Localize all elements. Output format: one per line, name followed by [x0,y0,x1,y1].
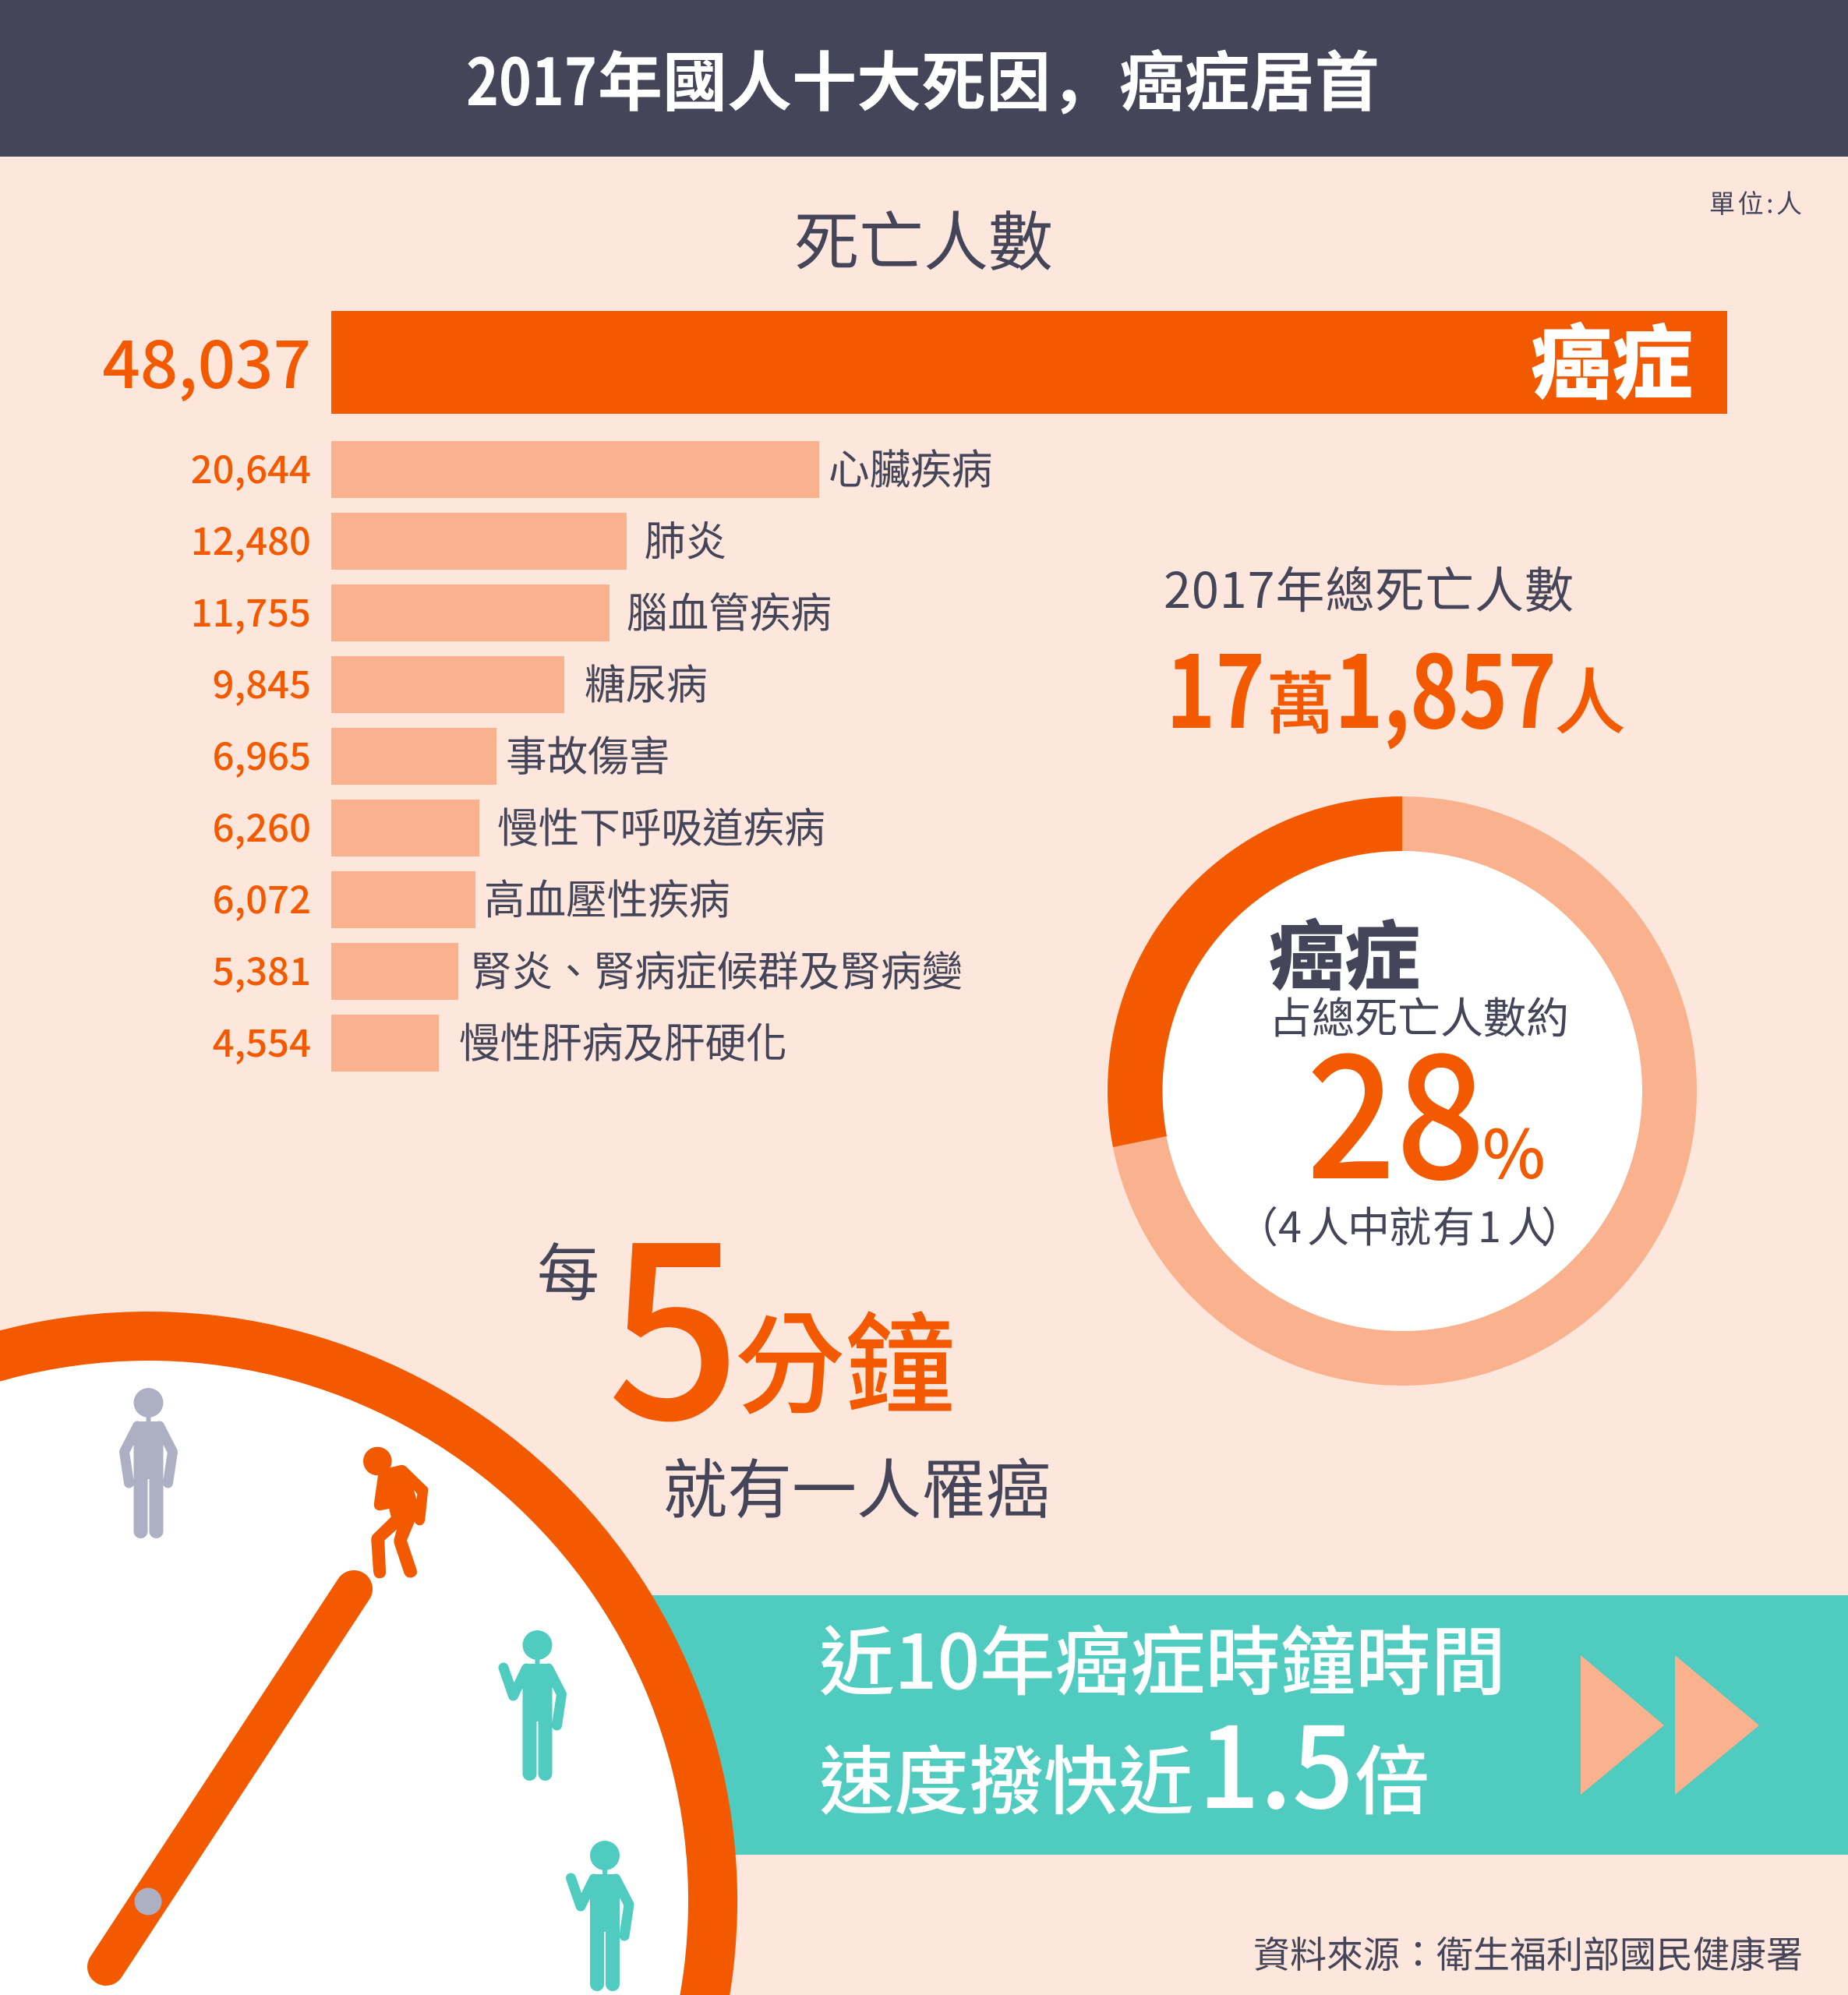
donut label: % [1482,1100,1546,1198]
total deaths block: 人 [1554,645,1626,749]
bar: diabetes: 糖尿病 [585,652,708,711]
title: 2017 [466,30,597,124]
bar: heart disease: 心臟疾病 [829,437,992,496]
bar: pneumonia: 肺炎 [645,509,726,568]
icon: double arrows [1581,1655,1759,1795]
bar: cancer [102,298,1727,415]
title: ， [1051,30,1115,124]
bar: chronic lower respiratory: 慢性下呼吸道疾病 [497,796,825,855]
unit note: 單位:人 [1709,183,1802,221]
teal banner [546,1595,1848,1855]
total deaths block [1164,552,1626,757]
bar: kidney disease: 腎炎、腎病症候群及腎病變 [471,939,963,998]
headline: every 5 minutes: 每 [537,1223,599,1314]
bar: chronic lower respiratory: 6,260 [213,798,311,853]
bar: diabetes [213,652,708,713]
total deaths block: 17 [1166,613,1265,757]
bar: liver disease [213,1011,787,1072]
bar: kidney disease [213,939,963,1000]
bar: liver disease: 4,554 [213,1013,311,1068]
bar: accidents: 事故傷害 [506,724,670,783]
bar: hypertension [213,867,730,928]
chart heading: 死亡人數 [794,190,1053,284]
banner text line 2: 1.5 [1198,1679,1354,1841]
icon: orange person bending over [363,1447,428,1578]
bar: heart disease: 20,644 [191,440,311,495]
bar: chronic lower respiratory [213,796,825,856]
headline: every 5 minutes: 就有一人罹癌 [663,1438,1051,1531]
banner text line 2: 倍 [1355,1721,1429,1830]
bar: hypertension: 高血壓性疾病 [484,867,730,927]
headline: every 5 minutes: 5 [607,1135,741,1489]
source note: 資料來源：衛生福利部國民健康署 [1253,1925,1803,1979]
clock hand [106,1589,354,1967]
headline: every 5 minutes: 分鐘 [735,1276,955,1436]
title: 年國人十大死因 [598,30,1051,124]
title: 癌症居首 [1119,30,1380,125]
bar: cancer: 癌症 [1531,298,1693,415]
donut chart: cancer share 28% [1108,796,1670,1358]
bar: heart disease [191,437,992,498]
bar: hypertension: 6,072 [213,870,311,925]
icon: gray standing person [125,1388,173,1538]
banner text line 1: 近10年癌症時鐘時間 [819,1601,1506,1711]
bar: cerebrovascular: 11,755 [191,583,311,638]
icon: teal person waving lower [571,1841,629,1991]
bar: accidents: 6,965 [213,726,311,782]
clock pivot [134,1887,162,1916]
bar: pneumonia [191,509,726,570]
bar: cerebrovascular: 腦血管疾病 [627,581,832,640]
bar: cerebrovascular [191,581,832,641]
total deaths block: 萬 [1267,650,1334,748]
total deaths block: 1,857 [1334,613,1556,757]
bar: kidney disease: 5,381 [213,941,311,997]
headline: every 5 minutes [537,1135,1051,1531]
donut label: （4人中就有1人） [1236,1193,1583,1255]
donut label: 28 [1306,980,1486,1228]
bar: cancer: 48,037 [102,312,311,408]
icon: teal person waving [504,1630,561,1781]
banner text line 2: 速度撥快近 [819,1721,1193,1830]
bar chart: deaths by cause [102,298,1727,1072]
clock [0,1312,737,1995]
bar: pneumonia: 12,480 [191,511,311,567]
bar: diabetes: 9,845 [213,655,311,710]
bar: liver disease: 慢性肝病及肝硬化 [459,1011,787,1070]
header banner [0,0,1848,157]
donut label: 癌症 [1269,895,1420,1005]
donut label [1236,895,1583,1255]
bar: accidents [213,724,670,785]
total deaths block: 2017年總死亡人數 [1164,552,1574,623]
donut label: 占總死亡人數約 [1269,983,1569,1046]
